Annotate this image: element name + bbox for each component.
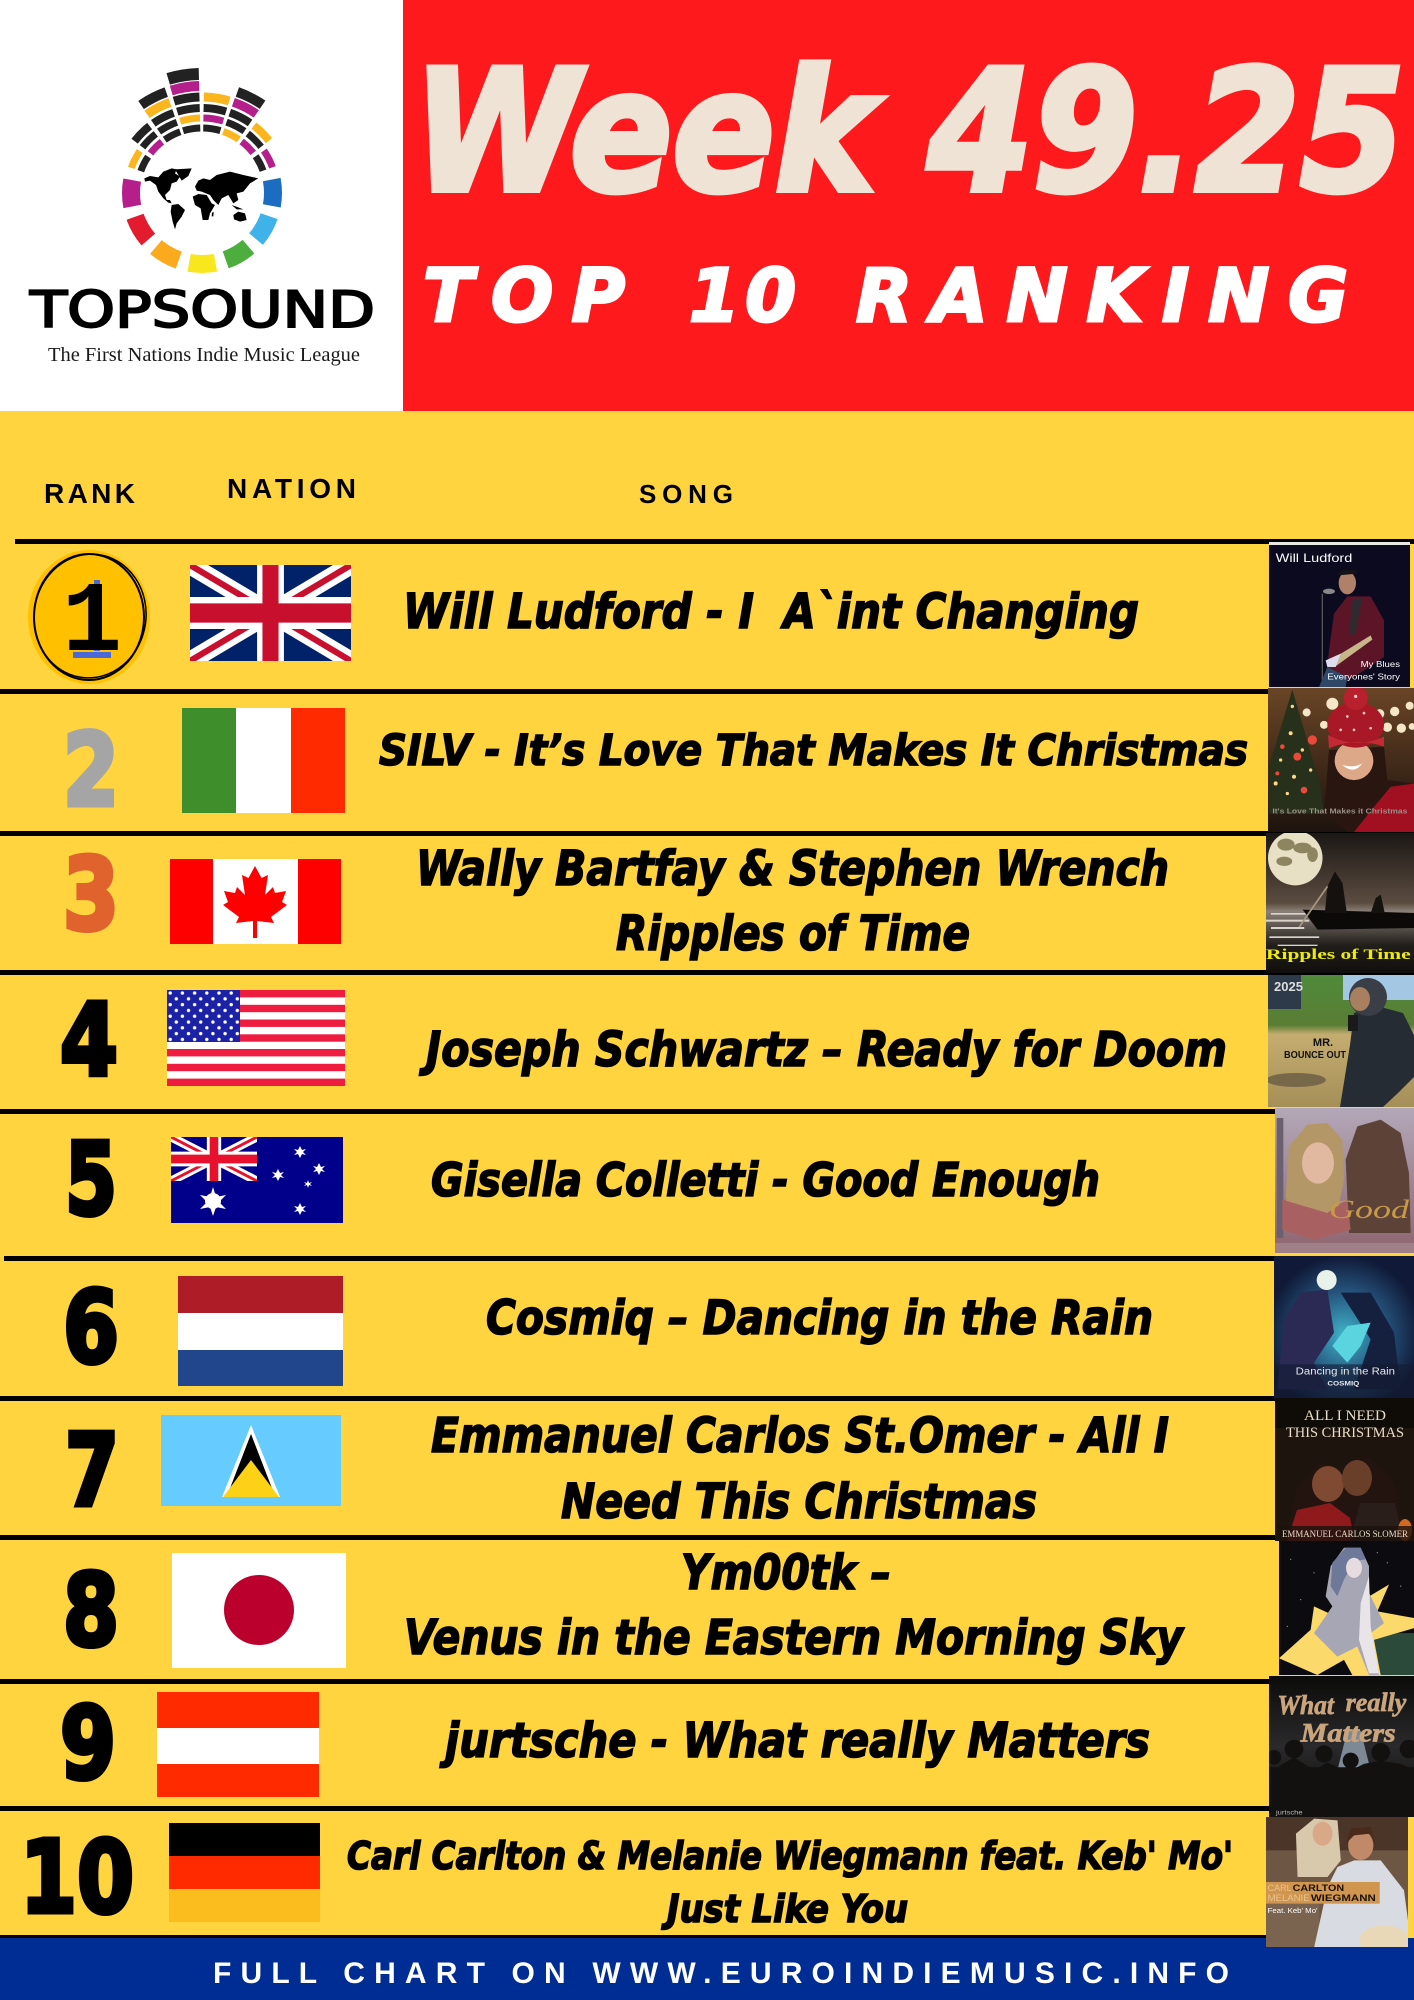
song 10: Carl Carlton & Melanie Wiegmann feat. Keb' Mo' (347, 1834, 1233, 1878)
rank 4: 4 (60, 982, 118, 1099)
album cover 3: Ripples of Time (1266, 947, 1411, 963)
header: song: SONG (639, 479, 733, 509)
song 9: jurtsche - What really Matters (439, 1713, 1150, 1769)
album cover 1: Will Ludford (1276, 551, 1352, 565)
song 1: Will Ludford - I A`int Changing (403, 584, 1139, 640)
song 2: SILV - It’s Love That Makes It Christmas (379, 726, 1248, 776)
album cover 5 (1275, 1108, 1414, 1253)
header panel: logo (0, 0, 403, 411)
row 5 (65, 1108, 1414, 1253)
rank 3: 3 (63, 836, 119, 953)
row 2 (63, 686, 1414, 832)
subtitle: top 10 ranking: 10 (689, 254, 796, 339)
rank 7: 7 (65, 1412, 119, 1529)
album cover 2: It's Love That Makes it Christmas (1272, 807, 1407, 816)
album cover 10: Feat. Keb' Mo' (1268, 1906, 1318, 1915)
flag: Australia (171, 1137, 343, 1223)
row 3: Ripples of Time (616, 906, 970, 962)
album cover 7: ALL I NEED (1304, 1408, 1386, 1424)
header: nation: NATION (227, 473, 356, 504)
row 7: Need This Christmas (561, 1474, 1037, 1530)
album cover 7: EMMANUEL CARLOS St.OMER (1282, 1529, 1408, 1539)
song 3: Wally Bartfay & Stephen Wrench (416, 841, 1169, 897)
album cover 3 (1266, 833, 1414, 973)
footer text: FULL CHART ON WWW.EUROINDIEMUSIC.INFO (213, 1957, 1229, 1990)
album cover 1 (1269, 542, 1410, 687)
row 8: Venus in the Eastern Morning Sky (404, 1610, 1184, 1666)
icon: colored ring (102, 93, 302, 293)
row 3 (63, 831, 1414, 973)
album cover 10: CARLTON (1293, 1883, 1344, 1893)
song 4: Joseph Schwartz – Ready for Doom (419, 1022, 1227, 1078)
row divider lines (0, 539, 1414, 1938)
album cover 9: Matters (1300, 1718, 1396, 1747)
album cover 7 (1275, 1398, 1414, 1541)
album cover 4: MR. (1313, 1037, 1333, 1049)
song 5: Gisella Colletti - Good Enough (431, 1153, 1100, 1207)
rank 5: 5 (65, 1121, 117, 1238)
row 10: Just Like You (661, 1887, 908, 1931)
flag: Italy (182, 708, 345, 813)
song 7: Emmanuel Carlos St.Omer - All I (431, 1408, 1169, 1464)
row 1 (26, 542, 1410, 687)
song 8: Ym00tk – (681, 1545, 891, 1601)
album cover 9: really (1346, 1688, 1407, 1717)
row 6 (63, 1256, 1414, 1399)
footer banner (0, 1938, 1414, 2000)
rank 10: 10 (20, 1819, 134, 1936)
flag: Japan (172, 1553, 346, 1668)
album cover 10 (1266, 1817, 1408, 1947)
rank 6: 6 (63, 1269, 119, 1386)
album cover 4: BOUNCE OUT (1284, 1050, 1346, 1061)
icon: equalizer fan (53, 44, 351, 342)
flag: Saint Lucia (161, 1415, 341, 1506)
flag: United Kingdom (190, 565, 351, 661)
row 4 (60, 975, 1414, 1107)
table headers (44, 473, 733, 509)
album cover 4 (1268, 975, 1414, 1107)
logo wordmark: TOPSOUND (29, 281, 375, 339)
album cover 10: MELANIE (1268, 1893, 1310, 1903)
header: rank: RANK (44, 478, 135, 509)
flag: Germany (169, 1823, 320, 1922)
header panel: title (403, 0, 1414, 411)
logo tagline: The First Nations Indie Music League (48, 344, 360, 366)
album cover 8 (1279, 1541, 1414, 1675)
subtitle: top 10 ranking: TOP (423, 254, 625, 339)
rank 8: 8 (63, 1552, 119, 1669)
album cover 7: THIS CHRISTMAS (1286, 1425, 1404, 1441)
rank 2: 2 (63, 712, 119, 829)
subtitle: top 10 ranking: RANKING (856, 254, 1348, 339)
album cover 6 (1274, 1256, 1414, 1399)
album cover 6: COSMIQ (1327, 1381, 1360, 1387)
album cover 9: jurtsche (1275, 1810, 1304, 1816)
row 7 (65, 1398, 1414, 1541)
song 6: Cosmiq – Dancing in the Rain (486, 1291, 1153, 1346)
album cover 4: 2025 (1274, 979, 1303, 994)
flag: Netherlands (178, 1276, 343, 1386)
album cover 1: Everyones' Story (1327, 671, 1401, 681)
row 10 (20, 1817, 1409, 1955)
album cover 9 (1269, 1676, 1414, 1817)
subtitle: top 10 ranking (423, 254, 1348, 339)
flag: Canada (170, 859, 341, 944)
flag: Austria (157, 1692, 319, 1797)
rank 9: 9 (60, 1685, 116, 1802)
album cover 1: My Blues (1361, 659, 1401, 669)
rank 1 badge: 1 (62, 568, 122, 681)
rank 1 badge (26, 547, 154, 685)
row 8 (63, 1541, 1414, 1675)
album cover 10: CARL (1268, 1883, 1292, 1893)
album cover 10: WIEGMANN (1311, 1893, 1376, 1903)
flag: United States (167, 990, 345, 1086)
album cover 9: What (1277, 1690, 1335, 1720)
album cover 2 (1268, 688, 1414, 832)
album cover 5: Good (1329, 1195, 1410, 1224)
row 9 (60, 1676, 1414, 1817)
icon: world map (144, 168, 258, 229)
album cover 6: Dancing in the Rain (1296, 1366, 1395, 1377)
